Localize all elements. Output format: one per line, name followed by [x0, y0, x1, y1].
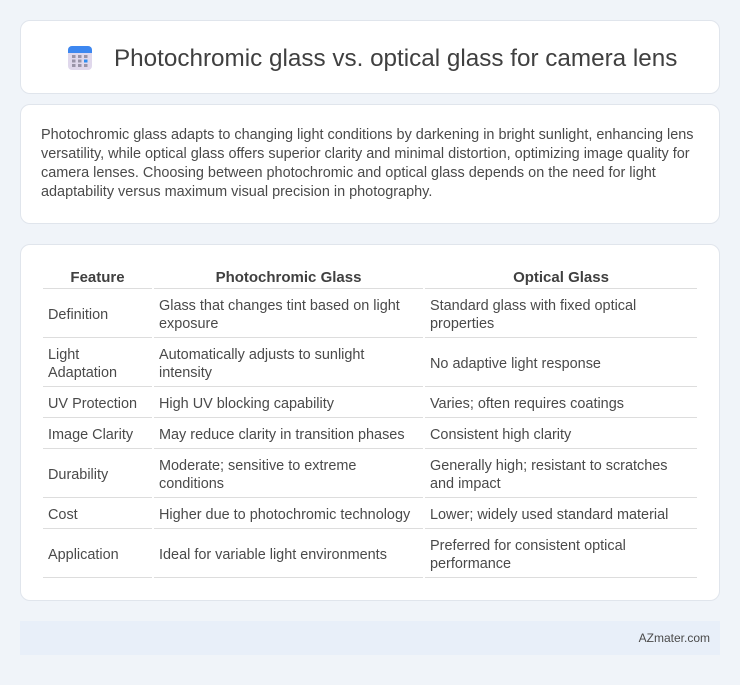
comparison table: May reduce clarity in transition phases [159, 427, 405, 443]
comparison table: Varies; often requires coatings [430, 396, 624, 412]
summary text [41, 127, 694, 200]
comparison table: Higher due to photochromic technology [159, 507, 410, 523]
comparison table: Consistent high clarity [430, 427, 571, 443]
comparison table: Lower; widely used standard material [430, 507, 668, 523]
table header [70, 269, 609, 286]
comparison table: intensity [159, 365, 212, 381]
comparison table: Cost [48, 507, 78, 523]
comparison table: Glass that changes tint based on light [159, 298, 400, 314]
comparison table: Preferred for consistent optical [430, 538, 626, 554]
summary text: versatility, while optical glass offers superior clarity and minimal distortion, optimizing image quality for [41, 146, 690, 162]
comparison table: conditions [159, 476, 224, 492]
comparison table: Automatically adjusts to sunlight [159, 347, 364, 363]
comparison table: Image Clarity [48, 427, 133, 443]
comparison table: Application [48, 547, 119, 563]
title: Photochromic glass vs. optical glass for camera lens [114, 45, 677, 72]
comparison table: Definition [48, 307, 108, 323]
comparison table: Durability [48, 467, 108, 483]
comparison table: exposure [159, 316, 218, 332]
panel: comparison table [20, 244, 720, 601]
icon: calendar [68, 46, 92, 70]
summary text: Photochromic glass adapts to changing light conditions by darkening in bright sunlight, enhancing lens [41, 127, 694, 143]
summary text: camera lenses. Choosing between photochromic and optical glass depends on the need for light [41, 165, 656, 181]
table header: Feature [70, 269, 125, 286]
table header: Photochromic Glass [216, 269, 361, 286]
table header: Optical Glass [513, 269, 609, 286]
comparison table: Standard glass with fixed optical [430, 298, 636, 314]
comparison table: Ideal for variable light environments [159, 547, 387, 563]
comparison table: Generally high; resistant to scratches [430, 458, 668, 474]
comparison table: UV Protection [48, 396, 137, 412]
comparison table: Adaptation [48, 365, 117, 381]
summary text: adaptability versus maximum visual precision in photography. [41, 184, 432, 200]
comparison table: No adaptive light response [430, 356, 601, 372]
comparison table: High UV blocking capability [159, 396, 334, 412]
panel: summary [20, 104, 720, 224]
comparison table: and impact [430, 476, 501, 492]
comparison table: performance [430, 556, 511, 572]
comparison table: properties [430, 316, 494, 332]
comparison table: Light [48, 347, 79, 363]
panel: title header [20, 20, 720, 94]
footer bar [20, 621, 720, 655]
comparison table: Moderate; sensitive to extreme [159, 458, 356, 474]
comparison table [43, 269, 697, 578]
footer credit: AZmater.com [639, 631, 710, 645]
